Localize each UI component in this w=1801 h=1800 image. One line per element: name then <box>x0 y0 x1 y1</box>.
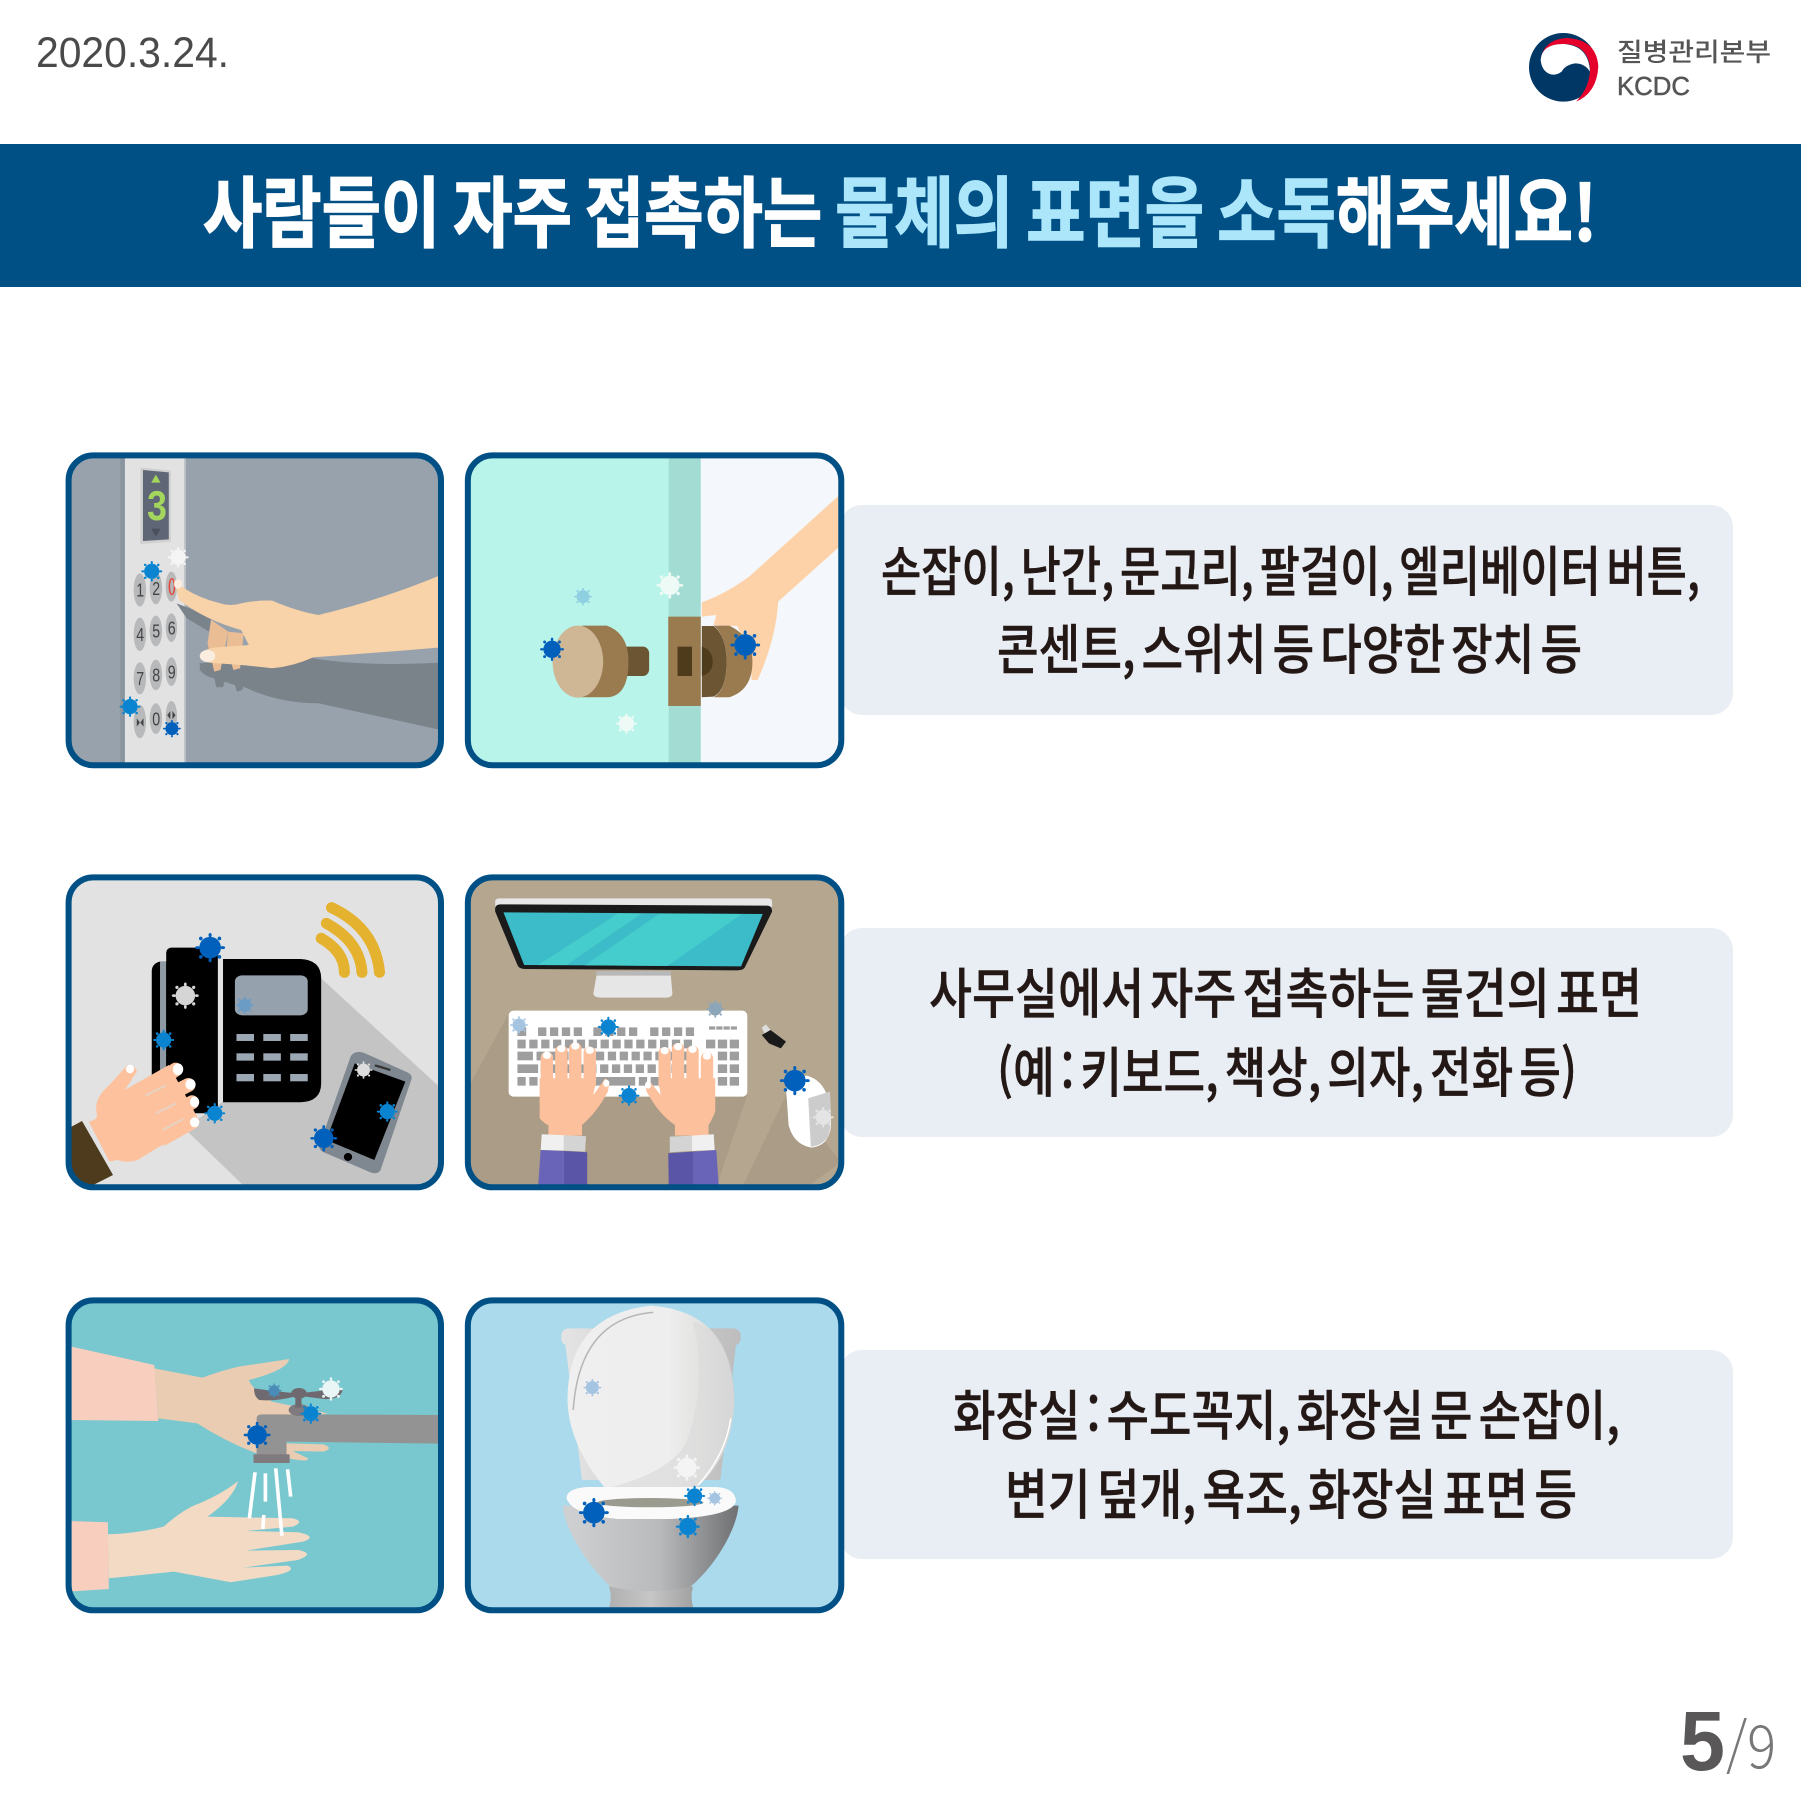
logo text: Korean: 질병관리본부 <box>1617 32 1771 69</box>
page number <box>1680 1694 1776 1788</box>
illustration: faucet and hands <box>69 1300 441 1610</box>
illustration: elevator buttons <box>69 455 441 765</box>
logo text: KCDC: KCDC <box>1617 71 1690 101</box>
title banner <box>0 144 1801 287</box>
title: 사람들이 자주 접촉하는 물체의 표면을 소독해주세요! <box>203 153 1597 264</box>
icon: germs <box>120 547 189 737</box>
icon: germs <box>153 933 398 1152</box>
text: caption line 2: (예 : 키보드, 책상, 의자, 전화 등) <box>997 1029 1577 1108</box>
illustration: elevator buttons: 1 <box>136 581 144 601</box>
panel: row 2 caption <box>840 928 1733 1137</box>
icon: germs <box>579 1379 722 1538</box>
logo: KCDC <box>1529 32 1771 102</box>
icon: germs <box>510 1000 834 1128</box>
icon: germs <box>540 572 760 734</box>
date: 2020.3.24. <box>36 29 229 77</box>
illustration: door knob <box>468 455 841 765</box>
illustration: elevator buttons: 3 <box>147 483 167 530</box>
panel: row 1 caption <box>840 505 1733 715</box>
icon: germs <box>244 1377 343 1448</box>
text: caption line 1: 화장실 : 수도꼭지, 화장실 문 손잡이, <box>953 1372 1620 1451</box>
icon: taegeuk emblem <box>1529 33 1598 102</box>
text: caption line 2: 콘센트, 스위치 등 다양한 장치 등 <box>997 606 1582 685</box>
illustration: toilet <box>468 1300 841 1612</box>
illustration: elevator buttons: 5 <box>152 622 160 642</box>
illustration: elevator buttons: 2 <box>152 579 160 599</box>
illustration: elevator buttons: 6 <box>168 619 176 639</box>
illustration: elevator buttons: 4 <box>136 625 144 645</box>
illustration: elevator buttons: 0 <box>152 710 160 730</box>
illustration: elevator buttons: 9 <box>168 663 176 683</box>
text: caption line 2: 변기 덮개, 욕조, 화장실 표면 등 <box>1005 1451 1577 1530</box>
page number: 5 <box>1680 1694 1725 1788</box>
illustration: elevator buttons: 7 <box>136 669 144 689</box>
panel: row 3 caption <box>840 1350 1733 1559</box>
text: caption line 1: 사무실에서 자주 접촉하는 물건의 표면 <box>929 950 1642 1029</box>
illustration: computer keyboard <box>468 877 841 1187</box>
page number: /9 <box>1726 1701 1776 1785</box>
illustration: elevator buttons: 8 <box>152 666 160 686</box>
illustration: office phone <box>69 877 441 1187</box>
